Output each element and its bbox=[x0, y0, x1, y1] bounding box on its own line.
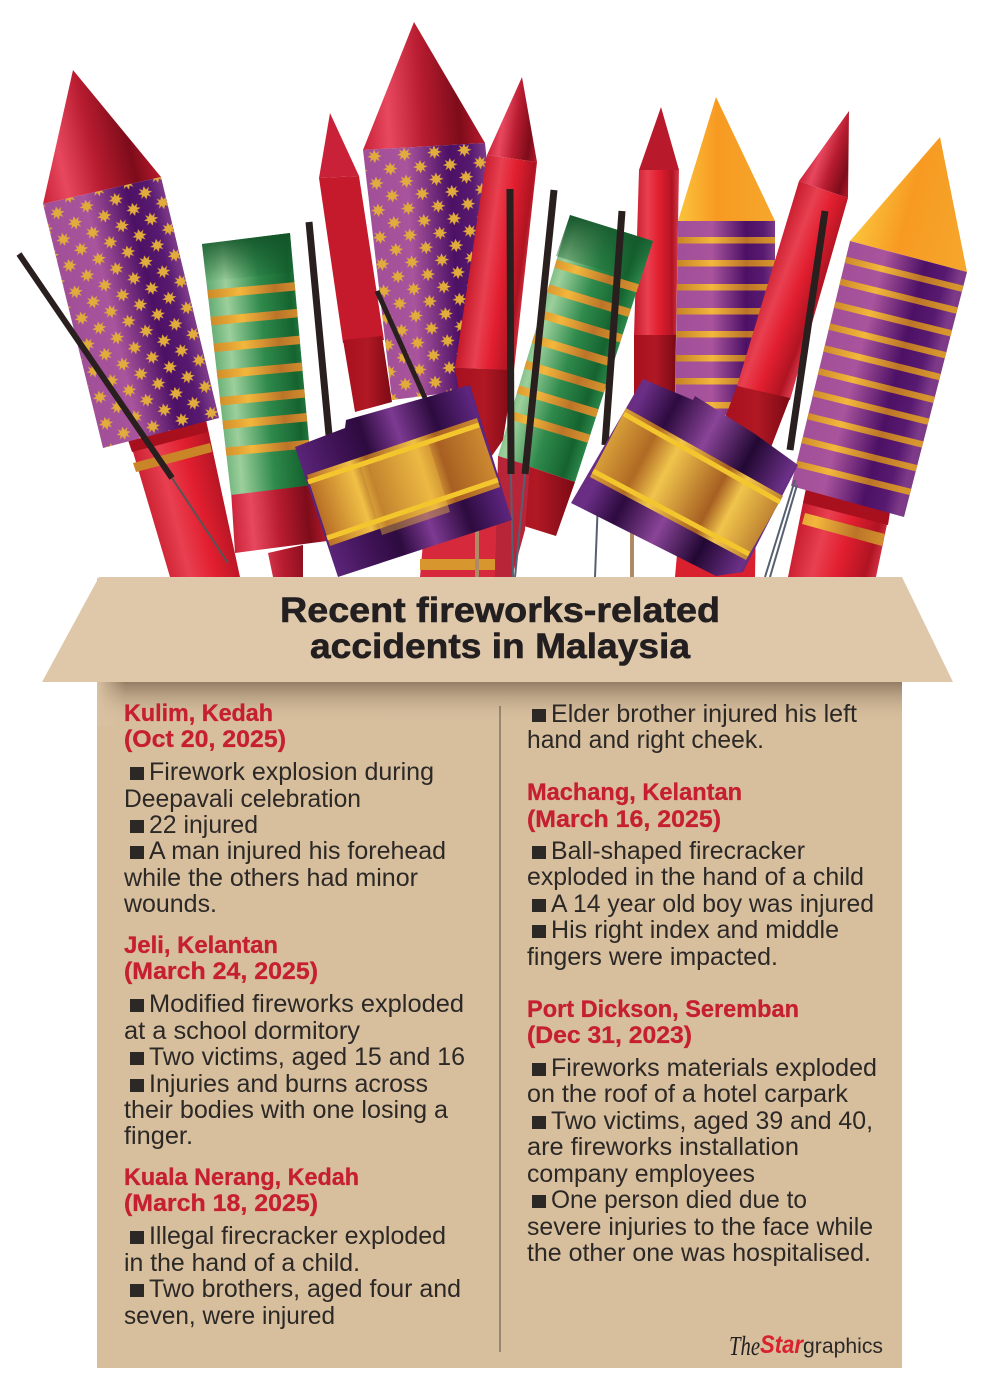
rocket tail: centre red with gold band bbox=[420, 500, 512, 577]
logo: The Star graphics bbox=[729, 1331, 883, 1361]
text block: Port Dickson, Seremban: Fireworks materials exploded bbox=[551, 1054, 877, 1082]
firecracker bundle: right bbox=[571, 379, 798, 576]
text block: Jeli, Kelantan: Jeli, Kelantan bbox=[124, 932, 278, 959]
text block: Kuala Nerang, Kedah: Illegal firecracker exploded bbox=[149, 1222, 446, 1250]
rocket: thin red back left bbox=[319, 113, 392, 412]
text block: Port Dickson, Seremban: One person died due to bbox=[551, 1186, 807, 1214]
sparklers: centre pair bbox=[510, 189, 634, 577]
text block: Kuala Nerang, Kedah: Kuala Nerang, Kedah bbox=[124, 1164, 359, 1191]
text block: Jeli, Kelantan: finger. bbox=[124, 1122, 193, 1150]
text block: Port Dickson, Seremban: Port Dickson, Seremban bbox=[527, 996, 799, 1023]
text block: Kulim, Kedah: wounds. bbox=[123, 890, 217, 918]
text block: Kuala Nerang continued: Elder brother injured his left bbox=[551, 700, 857, 728]
logo: The Star graphics: Star bbox=[760, 1331, 804, 1359]
text block: Port Dickson, Seremban: severe injuries to the face while bbox=[527, 1213, 873, 1241]
rocket: thin red right bbox=[634, 107, 679, 400]
title: Recent fireworks-related bbox=[280, 591, 720, 630]
text block: Port Dickson, Seremban: on the roof of a hotel carpark bbox=[527, 1080, 848, 1108]
text block: Kulim, Kedah: Kulim, Kedah bbox=[124, 700, 273, 727]
text block: Kulim, Kedah: A man injured his forehead bbox=[149, 837, 446, 865]
text block: Kuala Nerang continued bbox=[527, 700, 857, 754]
text block: Kuala Nerang, Kedah bbox=[124, 1164, 461, 1330]
fireworks illustration bbox=[19, 22, 980, 577]
box lid bbox=[42, 577, 953, 682]
text block: Machang, Kelantan: Machang, Kelantan bbox=[527, 779, 742, 806]
text block: Jeli, Kelantan bbox=[124, 932, 465, 1150]
text block: Machang, Kelantan: (March 16, 2025) bbox=[527, 806, 721, 833]
text block: Port Dickson, Seremban: are fireworks installation bbox=[527, 1133, 799, 1161]
text block: Port Dickson, Seremban: Two victims, aged 39 and 40, bbox=[551, 1107, 873, 1135]
text block: Machang, Kelantan: fingers were impacted. bbox=[527, 943, 778, 971]
text block: Kuala Nerang, Kedah: Two brothers, aged four and bbox=[149, 1275, 461, 1303]
text block: Kuala Nerang continued: hand and right cheek. bbox=[527, 726, 764, 754]
text block: Kuala Nerang, Kedah: (March 18, 2025) bbox=[124, 1190, 318, 1217]
rocket: tilted red right bbox=[675, 111, 849, 577]
text block: Jeli, Kelantan: Modified fireworks exploded bbox=[149, 990, 464, 1018]
text block: Jeli, Kelantan: Two victims, aged 15 and 16 bbox=[149, 1043, 465, 1071]
text block: Port Dickson, Seremban: company employees bbox=[527, 1160, 755, 1188]
text block: Kuala Nerang, Kedah: in the hand of a child. bbox=[124, 1249, 360, 1277]
sparkler: centre diagonal bbox=[377, 291, 425, 398]
text block: Kulim, Kedah: 22 injured bbox=[149, 811, 258, 839]
text block: Port Dickson, Seremban bbox=[527, 996, 877, 1267]
rocket: green stripes left bbox=[190, 233, 327, 577]
text block: Kulim, Kedah bbox=[123, 700, 446, 918]
text block: Jeli, Kelantan: Injuries and burns across bbox=[149, 1070, 428, 1098]
rocket: yellow cone purple stripes bbox=[670, 97, 780, 415]
title: accidents in Malaysia bbox=[310, 627, 691, 666]
text block: Kulim, Kedah: Deepavali celebration bbox=[124, 785, 361, 813]
sparkler: left bbox=[19, 254, 228, 563]
sparkler: right bbox=[765, 211, 825, 577]
logo: The Star graphics: The bbox=[729, 1331, 760, 1361]
text block: Kuala Nerang, Kedah: seven, were injured bbox=[124, 1302, 335, 1330]
firecracker bundle: left bbox=[295, 385, 512, 577]
text block: Jeli, Kelantan: their bodies with one losing a bbox=[124, 1096, 448, 1124]
sparkler: behind left bundle bbox=[309, 222, 329, 435]
rocket: tilted green bbox=[495, 215, 653, 577]
text block: Machang, Kelantan: Ball-shaped firecracker bbox=[551, 837, 805, 865]
box body bbox=[97, 680, 902, 1368]
rocket: yellow cone purple stripes right bbox=[785, 137, 980, 577]
text block: Kulim, Kedah: while the others had minor bbox=[123, 864, 418, 892]
text block: Machang, Kelantan: exploded in the hand of a child bbox=[527, 863, 864, 891]
column divider bbox=[500, 706, 501, 1352]
text block: Jeli, Kelantan: at a school dormitory bbox=[124, 1017, 361, 1045]
logo: The Star graphics: graphics bbox=[803, 1335, 883, 1358]
text block: Jeli, Kelantan: (March 24, 2025) bbox=[124, 958, 318, 985]
text block: Kulim, Kedah: Firework explosion during bbox=[149, 758, 434, 786]
text block: Machang, Kelantan bbox=[527, 779, 874, 971]
title bbox=[280, 591, 720, 666]
rocket: tall red centre bbox=[455, 77, 537, 480]
text block: Machang, Kelantan: His right index and middle bbox=[551, 916, 839, 944]
text block: Kulim, Kedah: (Oct 20, 2025) bbox=[124, 726, 286, 753]
text block: Port Dickson, Seremban: the other one was hospitalised. bbox=[527, 1239, 871, 1267]
text block: Port Dickson, Seremban: (Dec 31, 2023) bbox=[527, 1022, 692, 1049]
rocket: purple stars left bbox=[43, 70, 240, 577]
rocket: purple stars centre bbox=[363, 22, 510, 400]
text block: Machang, Kelantan: A 14 year old boy was injured bbox=[551, 890, 874, 918]
